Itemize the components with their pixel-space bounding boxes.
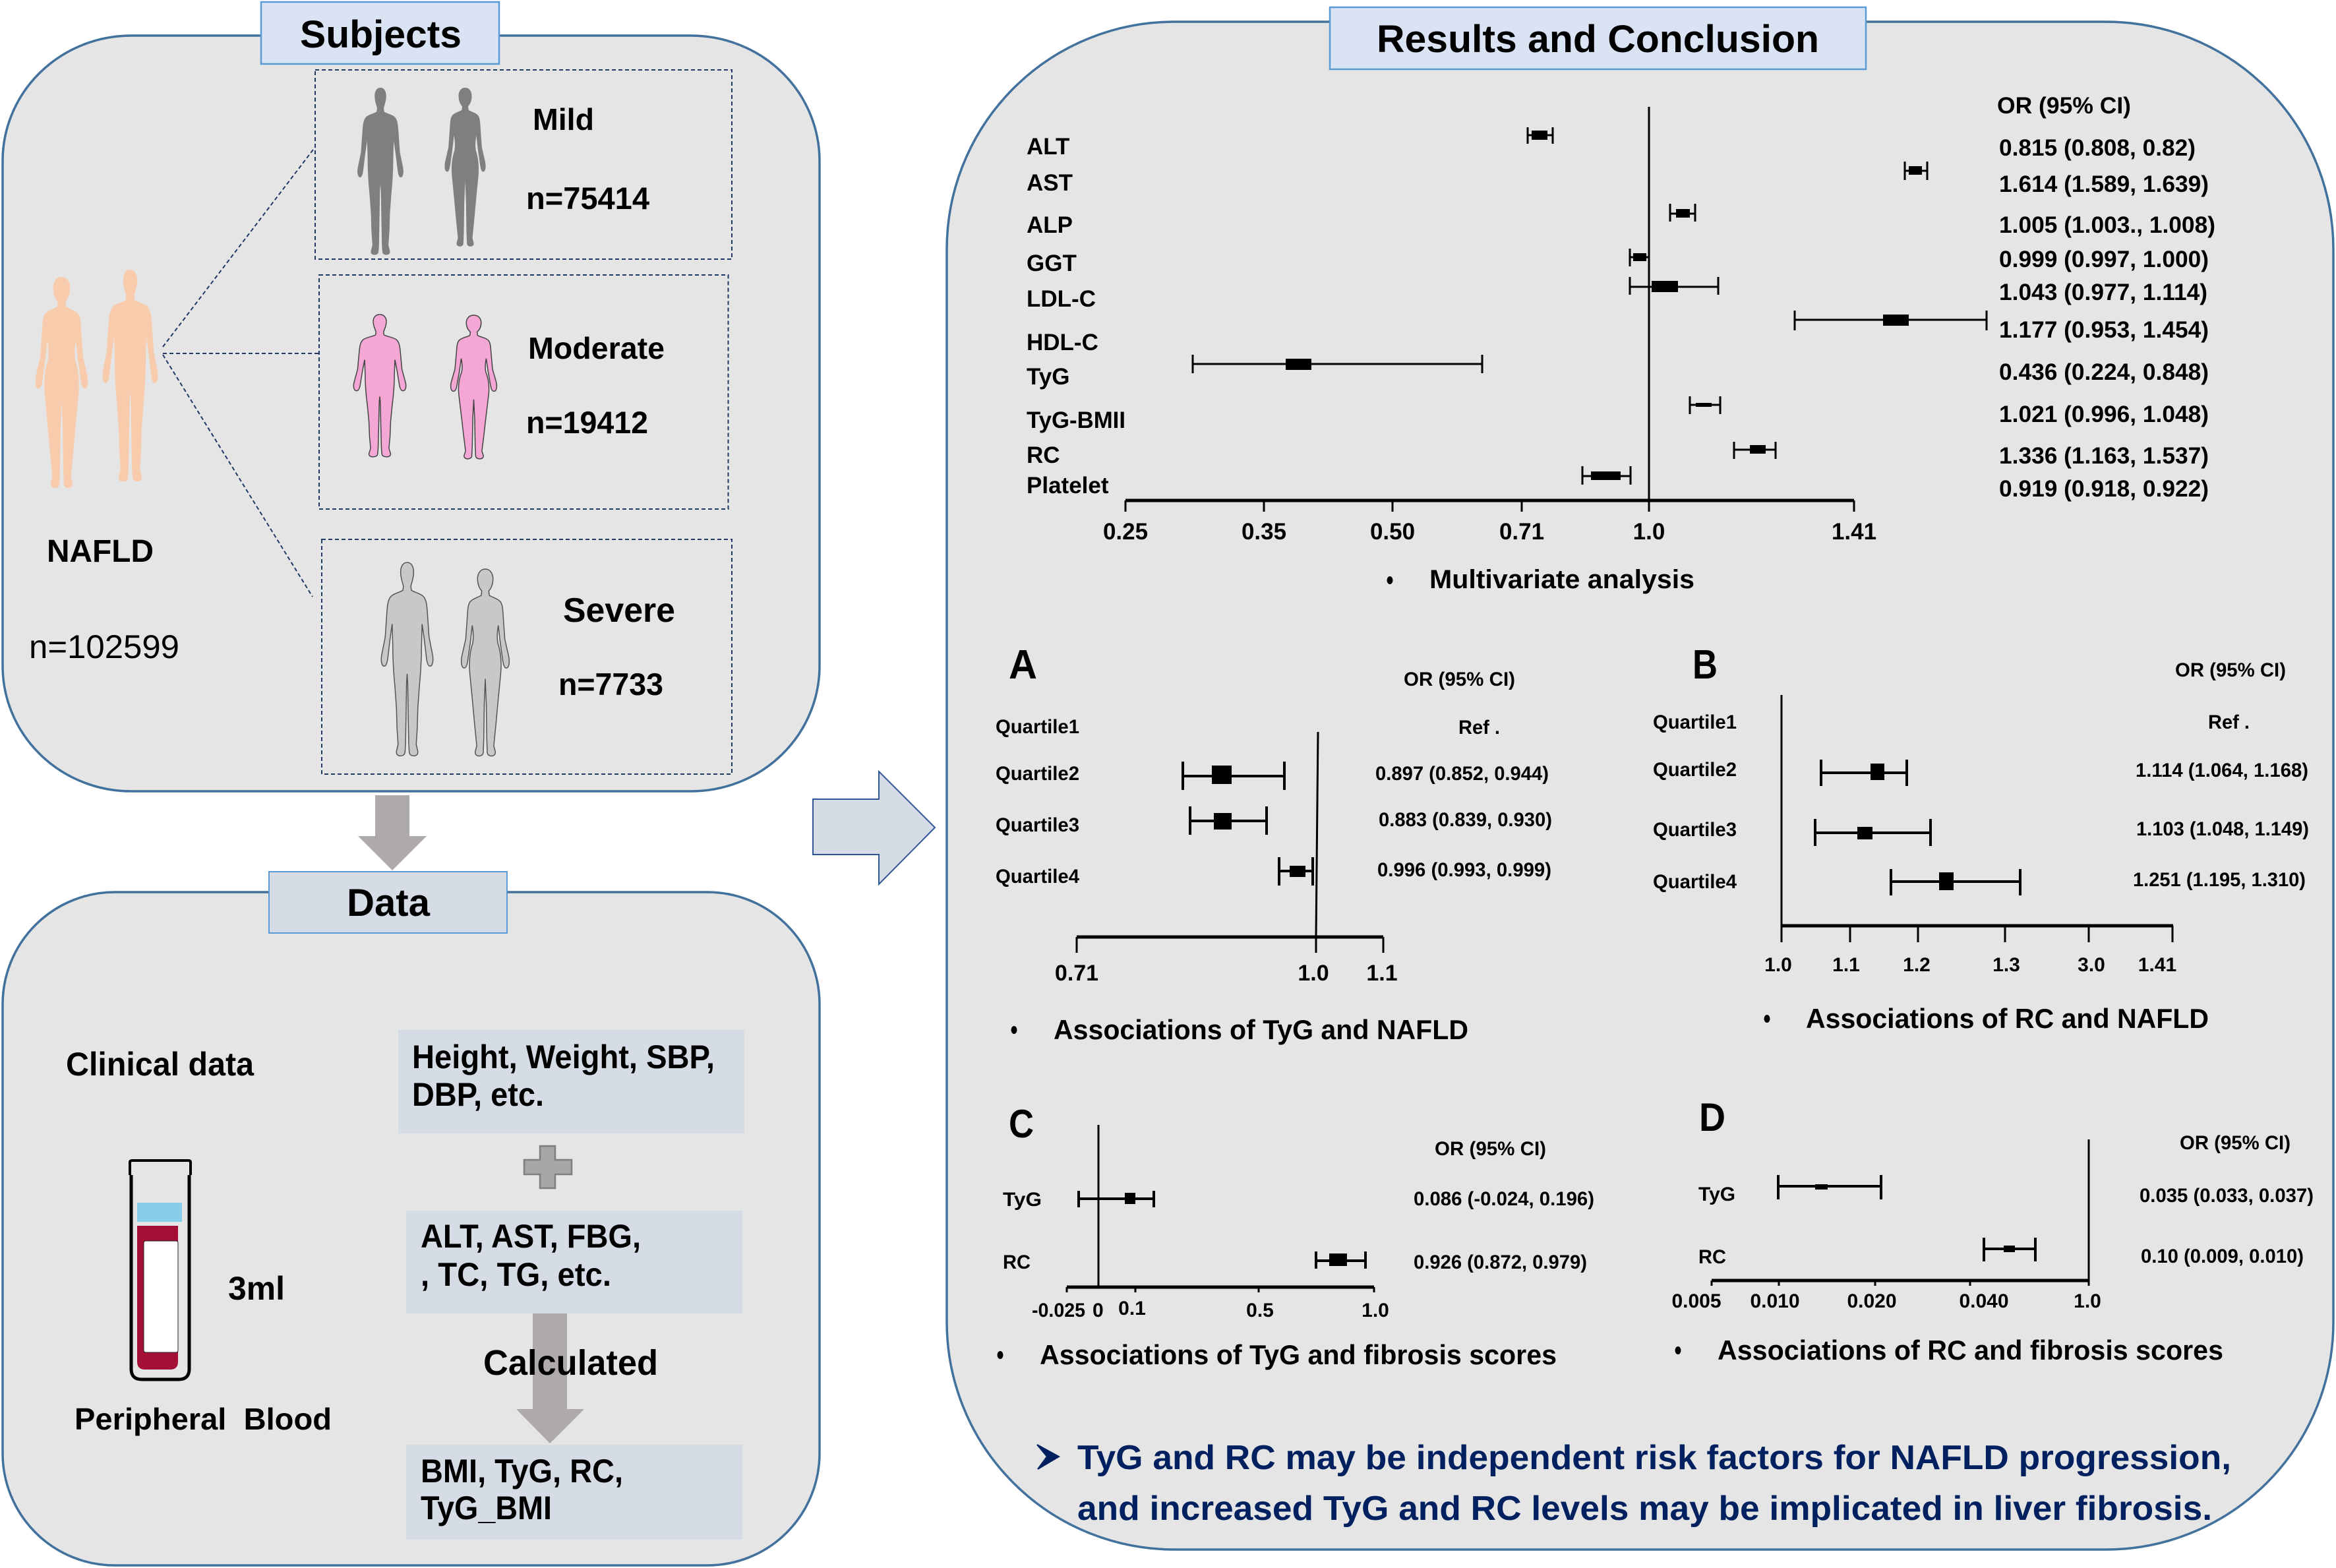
box: anthropometric data: DBP, etc. bbox=[412, 1076, 544, 1113]
label: 3ml: 3ml bbox=[228, 1270, 285, 1307]
row labels: LDL-C bbox=[1027, 286, 1096, 312]
axis labels: 0.50 bbox=[1370, 519, 1415, 545]
chart B: RC and NAFLD: B bbox=[1692, 642, 1718, 688]
icon: NAFLD female and male silhouettes bbox=[36, 270, 158, 488]
caption: D: Associations of RC and fibrosis scores bbox=[1718, 1335, 2223, 1366]
chart D: RC and fibrosis: 1.0 bbox=[2074, 1290, 2101, 1312]
chart B: RC and NAFLD: 1.1 bbox=[1832, 954, 1860, 976]
chart A: TyG and NAFLD: A bbox=[1009, 642, 1037, 688]
chart A: TyG and NAFLD: 0.883 (0.839, 0.930) bbox=[1379, 809, 1552, 831]
OR column: OR (95% CI) bbox=[1997, 93, 2131, 119]
box: derived indices: TyG_BMI bbox=[421, 1490, 552, 1526]
caption: multivariate analysis: Multivariate analysis bbox=[1429, 565, 1694, 594]
panel: subjects bbox=[3, 2, 820, 791]
icon: arrow bullet bbox=[1037, 1445, 1059, 1469]
chart B: RC and NAFLD: 1.251 (1.195, 1.310) bbox=[2133, 869, 2306, 891]
panel background bbox=[3, 36, 820, 791]
chart A: TyG and NAFLD: OR (95% CI) bbox=[1404, 669, 1515, 690]
chart D: RC and fibrosis: TyG bbox=[1698, 1184, 1735, 1205]
chart C: TyG/RC and fibrosis bbox=[1003, 1102, 1594, 1321]
axis labels bbox=[1103, 519, 1876, 545]
icon: mild silhouettes bbox=[357, 88, 486, 255]
count: severe: n=7733 bbox=[558, 667, 663, 702]
chart B: RC and NAFLD: Quartile4 bbox=[1653, 871, 1737, 893]
heading: subjects: Subjects bbox=[300, 13, 462, 56]
chart A: TyG and NAFLD: 0.71 bbox=[1055, 961, 1098, 986]
OR column: 1.177 (0.953, 1.454) bbox=[1999, 317, 2209, 343]
row labels: GGT bbox=[1027, 251, 1077, 276]
row labels: HDL-C bbox=[1027, 330, 1098, 355]
chart A: TyG and NAFLD: 1.1 bbox=[1366, 961, 1398, 986]
chart A: TyG and NAFLD: Quartile4 bbox=[996, 866, 1079, 888]
OR column: 1.005 (1.003., 1.008) bbox=[1999, 212, 2215, 238]
axis labels: 0.25 bbox=[1103, 519, 1148, 545]
row labels: Platelet bbox=[1027, 473, 1109, 498]
box: derived indices: BMI, TyG, RC, bbox=[421, 1453, 623, 1490]
panel background bbox=[947, 22, 2333, 1550]
chart D: RC and fibrosis: 0.010 bbox=[1750, 1290, 1800, 1312]
heading: data: Data bbox=[347, 882, 431, 924]
axis labels: 1.41 bbox=[1832, 519, 1876, 545]
chart B: RC and NAFLD: Quartile1 bbox=[1653, 711, 1737, 733]
box: severe bbox=[322, 539, 732, 774]
reference line and axis bbox=[1648, 107, 1650, 500]
chart B: RC and NAFLD: Ref . bbox=[2208, 711, 2250, 733]
chart C: TyG/RC and fibrosis: -0.025 bbox=[1032, 1300, 1085, 1321]
label: severe: Severe bbox=[563, 591, 675, 630]
caption: C: Associations of TyG and fibrosis scores bbox=[1040, 1339, 1557, 1370]
OR column: 1.021 (0.996, 1.048) bbox=[1999, 402, 2209, 427]
arrow: calculated bbox=[516, 1313, 584, 1443]
label: calculated: Calculated bbox=[483, 1343, 658, 1383]
panel background bbox=[3, 892, 820, 1565]
chart C: TyG/RC and fibrosis: 0.1 bbox=[1118, 1298, 1146, 1319]
box: biochemical data bbox=[406, 1211, 742, 1313]
heading: results and conclusion bbox=[1330, 7, 1866, 69]
chart B: RC and NAFLD: Quartile2 bbox=[1653, 759, 1737, 781]
chart C: TyG/RC and fibrosis: 0.5 bbox=[1246, 1300, 1274, 1321]
chart C: TyG/RC and fibrosis: 0.086 (-0.024, 0.196) bbox=[1414, 1188, 1594, 1210]
OR column bbox=[1997, 93, 2215, 502]
chart A: TyG and NAFLD bbox=[996, 642, 1552, 986]
OR column: 1.043 (0.977, 1.114) bbox=[1999, 280, 2207, 305]
axis labels: 1.0 bbox=[1633, 519, 1665, 545]
box: derived indices bbox=[406, 1445, 742, 1540]
row labels bbox=[1027, 134, 1125, 498]
axis labels: 0.71 bbox=[1499, 519, 1544, 545]
count: mild: n=75414 bbox=[526, 181, 649, 216]
label: clinical data: Clinical data bbox=[66, 1046, 255, 1083]
chart B: RC and NAFLD: 1.41 bbox=[2138, 954, 2176, 976]
chart A: TyG and NAFLD: Quartile1 bbox=[996, 716, 1079, 738]
panel: results and conclusion bbox=[947, 7, 2333, 1550]
chart A: TyG and NAFLD: 0.996 (0.993, 0.999) bbox=[1377, 859, 1551, 881]
label: mild: Mild bbox=[533, 102, 594, 136]
chart C: TyG/RC and fibrosis: 1.0 bbox=[1362, 1300, 1389, 1321]
chart B: RC and NAFLD: 1.3 bbox=[1992, 954, 2020, 976]
forest rows bbox=[1193, 127, 1987, 485]
arrow: subjects to data bbox=[358, 795, 427, 870]
chart D: RC and fibrosis: 0.005 bbox=[1671, 1290, 1722, 1312]
chart D: RC and fibrosis: D bbox=[1699, 1095, 1725, 1139]
chart B: RC and NAFLD: 1.0 bbox=[1764, 954, 1792, 976]
label: NAFLD: NAFLD bbox=[47, 534, 154, 569]
row labels: AST bbox=[1027, 170, 1073, 196]
conclusion callout: and increased TyG and RC levels may be implicated in liver fibrosis. bbox=[1077, 1490, 2212, 1528]
OR column: 0.436 (0.224, 0.848) bbox=[1999, 359, 2209, 385]
chart A: TyG and NAFLD: Ref . bbox=[1458, 717, 1500, 739]
chart D: RC and fibrosis: 0.040 bbox=[1959, 1290, 2009, 1312]
chart D: RC and fibrosis: 0.020 bbox=[1847, 1290, 1897, 1312]
panel: data bbox=[3, 872, 820, 1565]
heading: results and conclusion: Results and Conclusion bbox=[1377, 18, 1819, 61]
OR column: 0.919 (0.918, 0.922) bbox=[1999, 476, 2209, 502]
chart B: RC and NAFLD: Quartile3 bbox=[1653, 819, 1737, 841]
box: moderate bbox=[319, 275, 728, 509]
chart B: RC and NAFLD: 1.2 bbox=[1903, 954, 1931, 976]
conclusion callout bbox=[1037, 1439, 2231, 1528]
chart C: TyG/RC and fibrosis: RC bbox=[1003, 1251, 1031, 1273]
caption: B: Associations of RC and NAFLD bbox=[1806, 1003, 2209, 1034]
chart D: RC and fibrosis: 0.035 (0.033, 0.037) bbox=[2140, 1185, 2314, 1207]
chart A: TyG and NAFLD: 0.897 (0.852, 0.944) bbox=[1375, 763, 1549, 785]
heading: data bbox=[269, 872, 507, 933]
connector lines bbox=[163, 147, 319, 597]
row labels: TyG bbox=[1027, 364, 1069, 390]
chart B: RC and NAFLD: OR (95% CI) bbox=[2175, 659, 2286, 681]
icon: severe silhouettes bbox=[381, 562, 509, 756]
OR column: 0.999 (0.997, 1.000) bbox=[1999, 247, 2209, 272]
chart B: RC and NAFLD: 1.103 (1.048, 1.149) bbox=[2136, 818, 2309, 840]
chart C: TyG/RC and fibrosis: TyG bbox=[1003, 1189, 1042, 1211]
box: anthropometric data: Height, Weight, SBP, bbox=[412, 1039, 715, 1075]
conclusion callout: TyG and RC may be independent risk factors for NAFLD progression, bbox=[1077, 1439, 2231, 1477]
caption: A: Associations of TyG and NAFLD bbox=[1054, 1014, 1468, 1045]
chart C: TyG/RC and fibrosis: C bbox=[1009, 1102, 1034, 1146]
box: biochemical data: ALT, AST, FBG, bbox=[421, 1218, 641, 1255]
row labels: TyG-BMII bbox=[1027, 407, 1125, 433]
row labels: ALT bbox=[1027, 134, 1069, 160]
OR column: 1.614 (1.589, 1.639) bbox=[1999, 171, 2209, 197]
heading: subjects bbox=[261, 2, 499, 64]
chart B: RC and NAFLD: 3.0 bbox=[2078, 954, 2105, 976]
row labels: ALP bbox=[1027, 212, 1073, 238]
icon: moderate silhouettes bbox=[353, 315, 496, 459]
axis labels: 0.35 bbox=[1242, 519, 1286, 545]
chart C: TyG/RC and fibrosis: 0 bbox=[1093, 1300, 1104, 1321]
chart: multivariate forest plot bbox=[1027, 93, 2215, 545]
box: biochemical data: , TC, TG, etc. bbox=[421, 1256, 611, 1293]
arrow: to results bbox=[813, 771, 935, 884]
chart D: RC and fibrosis: RC bbox=[1698, 1246, 1726, 1268]
icon: plus bbox=[524, 1146, 572, 1188]
icon: blood tube bbox=[130, 1161, 191, 1379]
box: anthropometric data bbox=[398, 1030, 744, 1133]
row labels: RC bbox=[1027, 442, 1060, 468]
OR column: 0.815 (0.808, 0.82) bbox=[1999, 135, 2196, 161]
chart A: TyG and NAFLD: Quartile3 bbox=[996, 814, 1079, 836]
label: moderate: Moderate bbox=[528, 331, 665, 365]
count: moderate: n=19412 bbox=[526, 405, 648, 440]
label: peripheral blood: Peripheral Blood bbox=[75, 1402, 332, 1436]
OR column: 1.336 (1.163, 1.537) bbox=[1999, 443, 2209, 469]
box: mild bbox=[315, 70, 732, 259]
chart D: RC and fibrosis: 0.10 (0.009, 0.010) bbox=[2141, 1246, 2304, 1267]
chart D: RC and fibrosis: OR (95% CI) bbox=[2180, 1132, 2291, 1154]
chart C: TyG/RC and fibrosis: 0.926 (0.872, 0.979) bbox=[1414, 1251, 1587, 1273]
chart C: TyG/RC and fibrosis: OR (95% CI) bbox=[1435, 1138, 1546, 1160]
chart B: RC and NAFLD bbox=[1653, 642, 2309, 976]
chart A: TyG and NAFLD: 1.0 bbox=[1298, 961, 1329, 986]
chart D: RC and fibrosis bbox=[1671, 1095, 2314, 1312]
label: total count: n=102599 bbox=[29, 628, 179, 665]
chart B: RC and NAFLD: 1.114 (1.064, 1.168) bbox=[2136, 760, 2308, 781]
chart A: TyG and NAFLD: Quartile2 bbox=[996, 763, 1079, 785]
